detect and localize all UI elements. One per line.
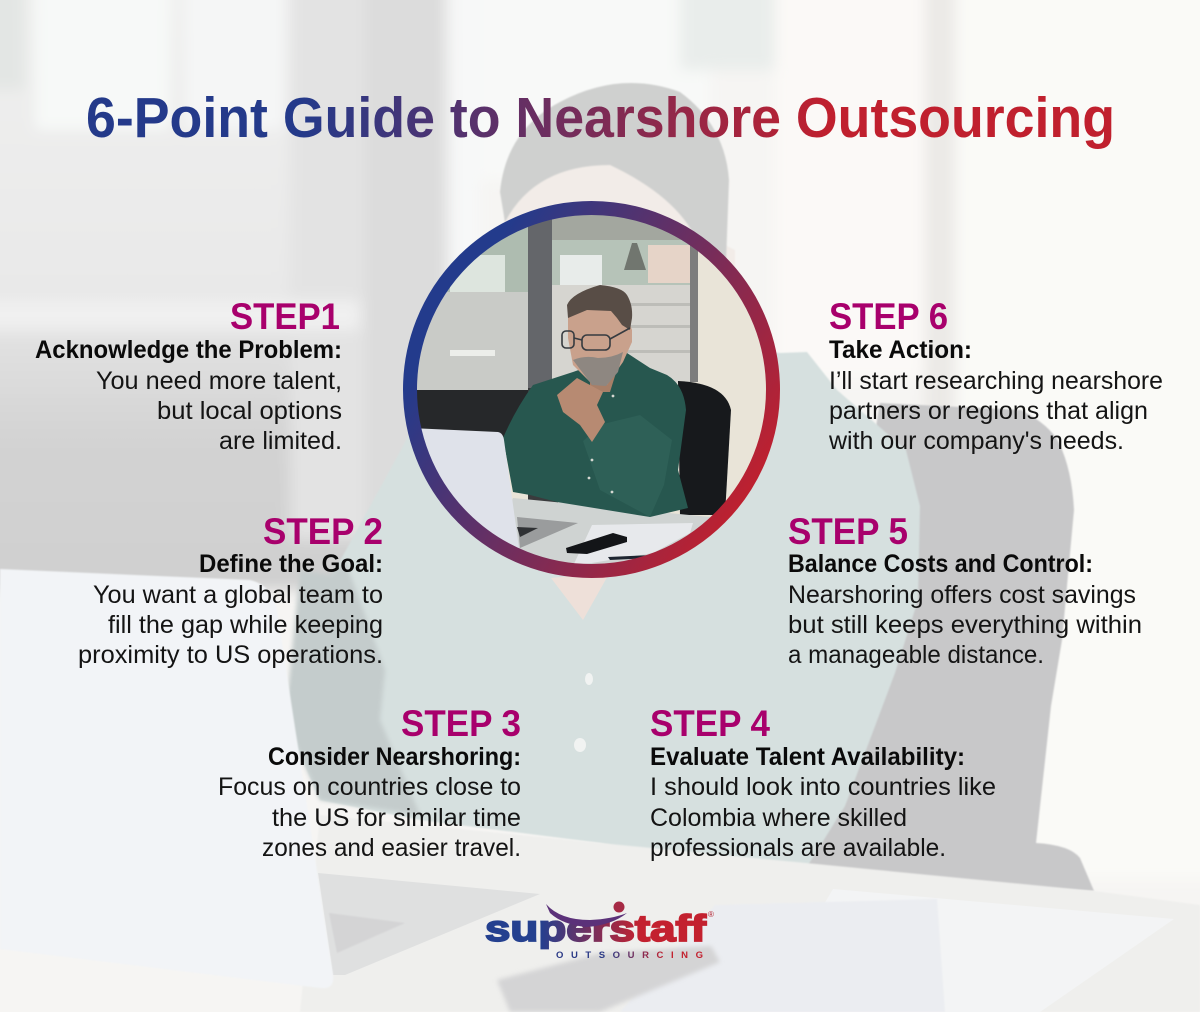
- step 3: [218, 703, 521, 862]
- photo: office scene: [417, 215, 766, 564]
- step 6: [828, 296, 1163, 455]
- central photo with gradient ring: [400, 195, 790, 585]
- step 6: I’ll start researching nearshore: [829, 367, 1163, 395]
- step 3: the US for similar time: [272, 804, 521, 832]
- step 1: Acknowledge the Problem:: [35, 336, 342, 364]
- man hair: [567, 285, 632, 330]
- phone: [566, 533, 627, 554]
- step 2: fill the gap while keeping: [108, 611, 383, 639]
- step 4: professionals are available.: [650, 834, 946, 862]
- man face: [568, 305, 632, 385]
- step 1: but local options: [157, 397, 342, 425]
- background: paper left: [620, 899, 945, 1012]
- step 6: STEP 6: [829, 296, 948, 337]
- background: neck skin: [551, 572, 610, 620]
- background: paper right: [760, 889, 1174, 1012]
- step 5: a manageable distance.: [788, 641, 1044, 669]
- step 5: but still keeps everything within: [788, 611, 1142, 639]
- laptop base: [517, 517, 578, 548]
- step 5: Balance Costs and Control:: [788, 550, 1093, 578]
- step 2: STEP 2: [263, 511, 383, 552]
- logo swoosh: [546, 904, 627, 927]
- step 2: proximity to US operations.: [78, 641, 383, 669]
- ring: [410, 208, 773, 571]
- background: laptop keyboard: [329, 913, 405, 953]
- step 4: Evaluate Talent Availability:: [650, 743, 965, 771]
- man shirt: [503, 353, 688, 517]
- step 1: You need more talent,: [96, 367, 342, 395]
- step 5: [788, 511, 1142, 669]
- step 3: Focus on countries close to: [218, 773, 521, 801]
- step 3: zones and easier travel.: [262, 834, 521, 862]
- background: table: [300, 815, 1200, 1012]
- step 6: with our company's needs.: [828, 427, 1124, 455]
- man sleeve: [583, 415, 672, 517]
- man hand: [557, 378, 605, 442]
- step 1: STEP1: [230, 296, 340, 337]
- shirt buttons: [588, 395, 614, 493]
- logo tagline: OUTSOURCING: [556, 950, 703, 961]
- glasses on desk: [608, 555, 646, 560]
- desk: [512, 498, 710, 564]
- step 4: Colombia where skilled: [650, 804, 907, 832]
- background: man shirt: [285, 330, 920, 878]
- papers: [573, 523, 693, 566]
- step 6: partners or regions that align: [829, 397, 1148, 425]
- background: shirt shadow: [285, 560, 420, 815]
- background: laptop base: [318, 873, 540, 975]
- background: shirt buttons: [574, 673, 593, 752]
- step 1: [35, 296, 342, 455]
- logo: SuperStaff Outsourcing: [485, 902, 714, 961]
- logo dot: [614, 902, 624, 912]
- step 4: I should look into countries like: [650, 773, 996, 801]
- background: chair: [800, 403, 1094, 891]
- background: phone: [497, 946, 720, 1012]
- background: man forehead: [500, 155, 735, 300]
- step 3: STEP 3: [401, 703, 521, 744]
- background: laptop lid: [0, 569, 333, 988]
- chair: [678, 381, 731, 515]
- step 4: STEP 4: [650, 703, 770, 744]
- logo wordmark: superstaff: [485, 908, 707, 949]
- step 1: are limited.: [219, 427, 342, 455]
- step 6: Take Action:: [829, 336, 972, 364]
- background: man hair: [500, 83, 729, 266]
- laptop lid: [422, 428, 519, 548]
- title: 6-Point Guide to Nearshore Outsourcing: [86, 86, 1115, 150]
- step 3: Consider Nearshoring:: [268, 743, 521, 771]
- step 2: You want a global team to: [93, 581, 383, 609]
- step 5: Nearshoring offers cost savings: [788, 581, 1136, 609]
- step 4: [650, 703, 996, 862]
- logo registered mark: ®: [708, 910, 714, 919]
- man neck: [590, 375, 616, 392]
- man glasses: [562, 328, 630, 350]
- man beard: [573, 352, 623, 386]
- step 2: Define the Goal:: [199, 550, 383, 578]
- step 5: STEP 5: [788, 511, 908, 552]
- step 2: [78, 511, 383, 669]
